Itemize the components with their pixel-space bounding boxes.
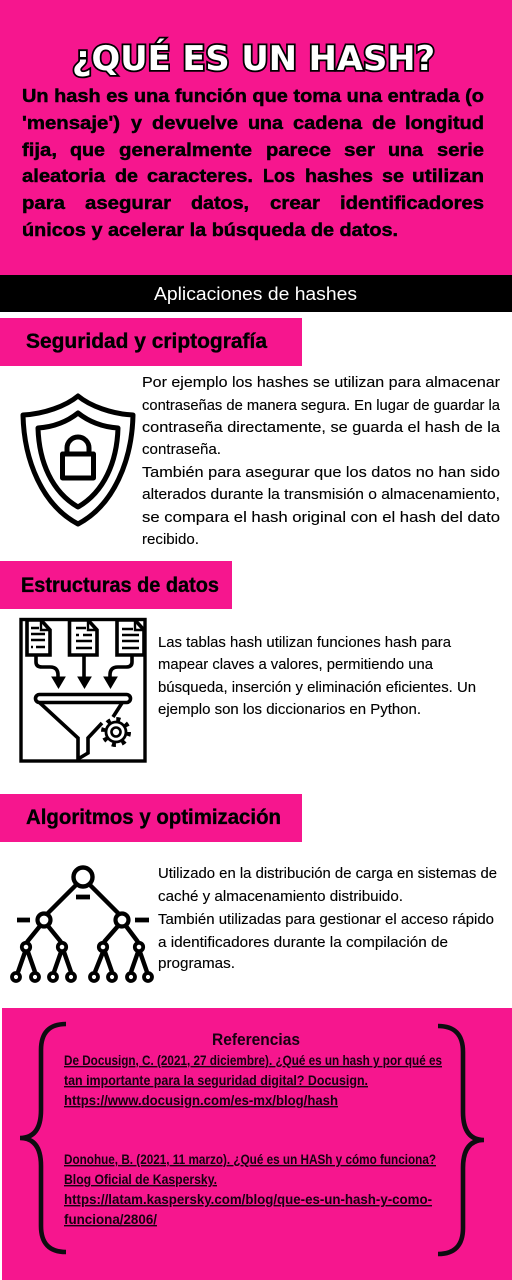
heading: Estructuras de datos bbox=[0, 561, 232, 609]
text block: intro paragraph: ser bbox=[344, 139, 375, 160]
text block: intro paragraph: únicos y acelerar la búsqueda de datos. bbox=[22, 219, 398, 240]
text block: intro paragraph: datos, bbox=[191, 192, 249, 213]
text block: intro paragraph: asegurar bbox=[85, 192, 171, 213]
title: ¿QUÉ ES UN HASH? bbox=[72, 38, 435, 79]
text block: reference list: funciona/2806/ bbox=[64, 1211, 157, 1227]
text block: intro paragraph: fija, bbox=[22, 139, 57, 160]
panel: intro background bbox=[0, 0, 512, 275]
text block: intro paragraph: se bbox=[382, 165, 404, 186]
text block: seguridad description: También para asegurar que los datos no han sido bbox=[142, 464, 500, 481]
text block: intro paragraph: longitud bbox=[405, 112, 484, 133]
text block: intro paragraph: para bbox=[22, 192, 66, 213]
icon: left curly brace bbox=[20, 1024, 66, 1252]
icon: shield with padlock bbox=[23, 396, 133, 524]
text block: reference list: https://latam.kaspersky.com/blog/que-es-un-hash-y-como- bbox=[64, 1191, 432, 1207]
text block: intro paragraph: caracteres. bbox=[147, 165, 253, 186]
text block: algoritmos description: a identificadores durante la compilación de bbox=[158, 934, 448, 951]
text block: intro paragraph: identificadores bbox=[340, 192, 484, 213]
heading: Seguridad y criptografía bbox=[0, 318, 302, 366]
text block: intro paragraph: de bbox=[115, 165, 138, 186]
icon: documents into funnel with gear bbox=[21, 620, 145, 761]
text block: intro paragraph: una bbox=[248, 112, 284, 133]
text block: reference list: https://www.docusign.com/es-mx/blog/hash bbox=[64, 1092, 338, 1108]
text block: algoritmos description: programas. bbox=[158, 955, 235, 972]
text block: estructuras description: mapear claves a valores, permitiendo una bbox=[158, 656, 434, 673]
text block: seguridad description: se compara el hash original con el hash del dato bbox=[142, 509, 500, 526]
text block: intro paragraph: que bbox=[70, 139, 105, 160]
icon: hierarchical tree bbox=[12, 868, 152, 981]
heading: Estructuras de datos: Estructuras de datos bbox=[21, 574, 219, 597]
heading: Algoritmos y optimización: Algoritmos y optimización bbox=[26, 806, 281, 829]
text block: intro paragraph: de bbox=[372, 112, 396, 133]
text block: estructuras description: Las tablas hash utilizan funciones hash para bbox=[158, 634, 452, 651]
text block: intro paragraph: Los bbox=[263, 165, 295, 186]
text block: intro paragraph: devuelve bbox=[152, 112, 238, 133]
panel: references bbox=[2, 1008, 512, 1280]
text block: seguridad description: alterados durante la transmisión o almacenamiento, bbox=[142, 486, 500, 503]
icon: right curly brace bbox=[438, 1026, 484, 1254]
text block: intro paragraph: una bbox=[388, 139, 424, 160]
text block: estructuras description: ejemplo son los diccionarios en Python. bbox=[158, 701, 421, 718]
text block: seguridad description bbox=[142, 374, 501, 548]
text block: seguridad description: recibido. bbox=[142, 531, 199, 548]
text block: intro paragraph: hashes bbox=[305, 165, 373, 186]
text block: seguridad description: contraseña directamente, se guarda el hash de la bbox=[142, 419, 501, 436]
heading: Algoritmos y optimización bbox=[0, 794, 302, 842]
text block: algoritmos description bbox=[158, 865, 497, 972]
text block: intro paragraph bbox=[22, 85, 484, 240]
text block: intro paragraph: 'mensaje') bbox=[22, 112, 120, 133]
text block: intro paragraph: crear bbox=[270, 192, 320, 213]
text block: intro paragraph: y bbox=[131, 112, 143, 133]
text block: seguridad description: contraseñas de manera segura. En lugar de guardar la bbox=[142, 397, 501, 414]
text block: algoritmos description: Utilizado en la distribución de carga en sistemas de bbox=[158, 865, 497, 882]
text block: seguridad description: contraseña. bbox=[142, 441, 221, 458]
text block: estructuras description: búsqueda, inserción y eliminación eficientes. Un bbox=[158, 679, 476, 696]
text block: intro paragraph: utilizan bbox=[412, 165, 484, 186]
text block: reference list: tan importante para la seguridad digital? Docusign. bbox=[64, 1072, 368, 1088]
text block: intro paragraph: parece bbox=[266, 139, 331, 160]
text block: reference list: Donohue, B. (2021, 11 marzo). ¿Qué es un HASh y cómo funciona? bbox=[64, 1151, 436, 1167]
text block: reference list: De Docusign, C. (2021, 27 diciembre). ¿Qué es un hash y por qué es bbox=[64, 1052, 442, 1068]
text block: intro paragraph: Un hash es una función que toma una entrada (o bbox=[22, 85, 484, 106]
heading: Referencias: Referencias bbox=[212, 1031, 300, 1049]
text block: reference list: Blog Oficial de Kaspersky. bbox=[64, 1171, 217, 1187]
text block: algoritmos description: También utilizadas para gestionar el acceso rápido bbox=[158, 911, 494, 928]
text block: seguridad description: Por ejemplo los hashes se utilizan para almacenar bbox=[142, 374, 500, 391]
text block: algoritmos description: caché y almacenamiento distribuido. bbox=[158, 888, 403, 905]
text block: intro paragraph: generalmente bbox=[119, 139, 252, 160]
text block: reference list bbox=[64, 1052, 442, 1227]
text block: intro paragraph: cadena bbox=[293, 112, 363, 133]
text block: intro paragraph: aleatoria bbox=[22, 165, 106, 186]
text block: intro paragraph: serie bbox=[437, 139, 484, 160]
text block: estructuras description bbox=[158, 634, 476, 718]
banner: Aplicaciones de hashes bbox=[0, 275, 512, 312]
banner: Aplicaciones de hashes: Aplicaciones de hashes bbox=[154, 283, 357, 304]
heading: Seguridad y criptografía: Seguridad y criptografía bbox=[26, 330, 267, 353]
